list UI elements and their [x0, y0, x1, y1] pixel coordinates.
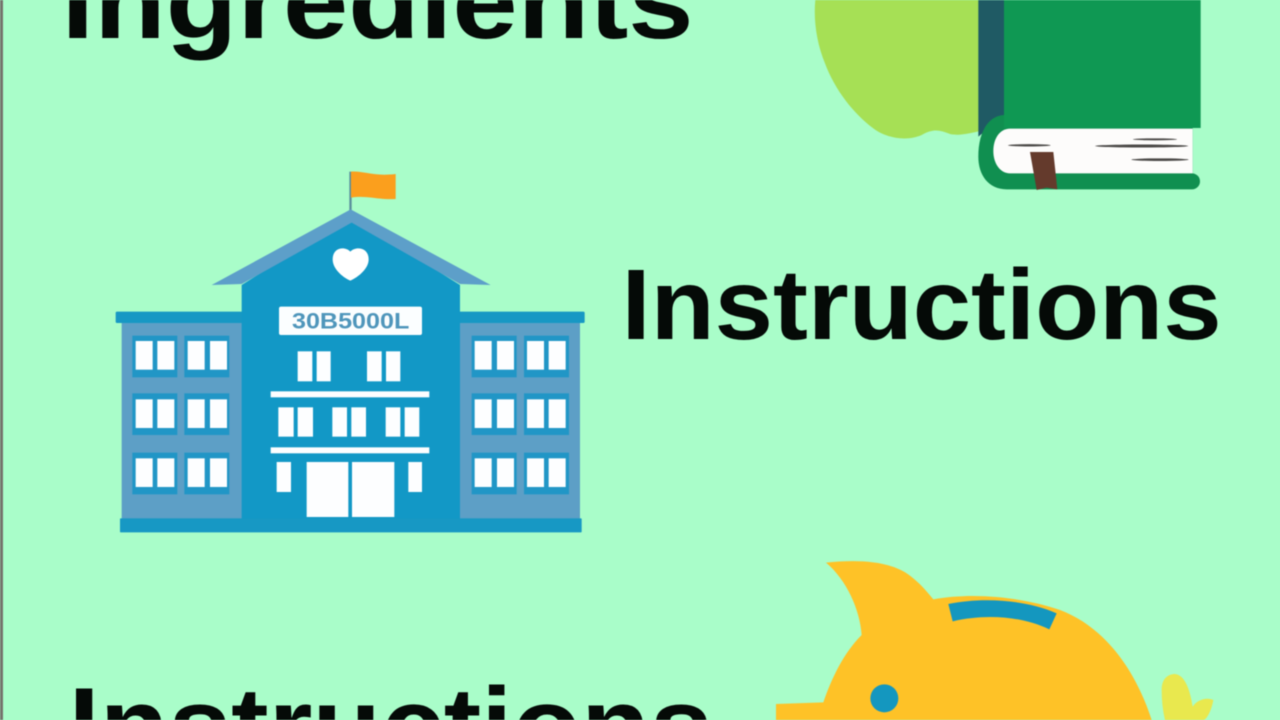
icon: yellow piggy bank — [776, 561, 1213, 720]
icon: green book — [978, 0, 1201, 190]
icon: school building — [116, 172, 585, 532]
icon: green apple shape behind book — [815, 0, 982, 138]
heading: Instructions (middle): Instructions — [622, 249, 1222, 361]
icon: school building: 30B5000L — [292, 309, 409, 334]
